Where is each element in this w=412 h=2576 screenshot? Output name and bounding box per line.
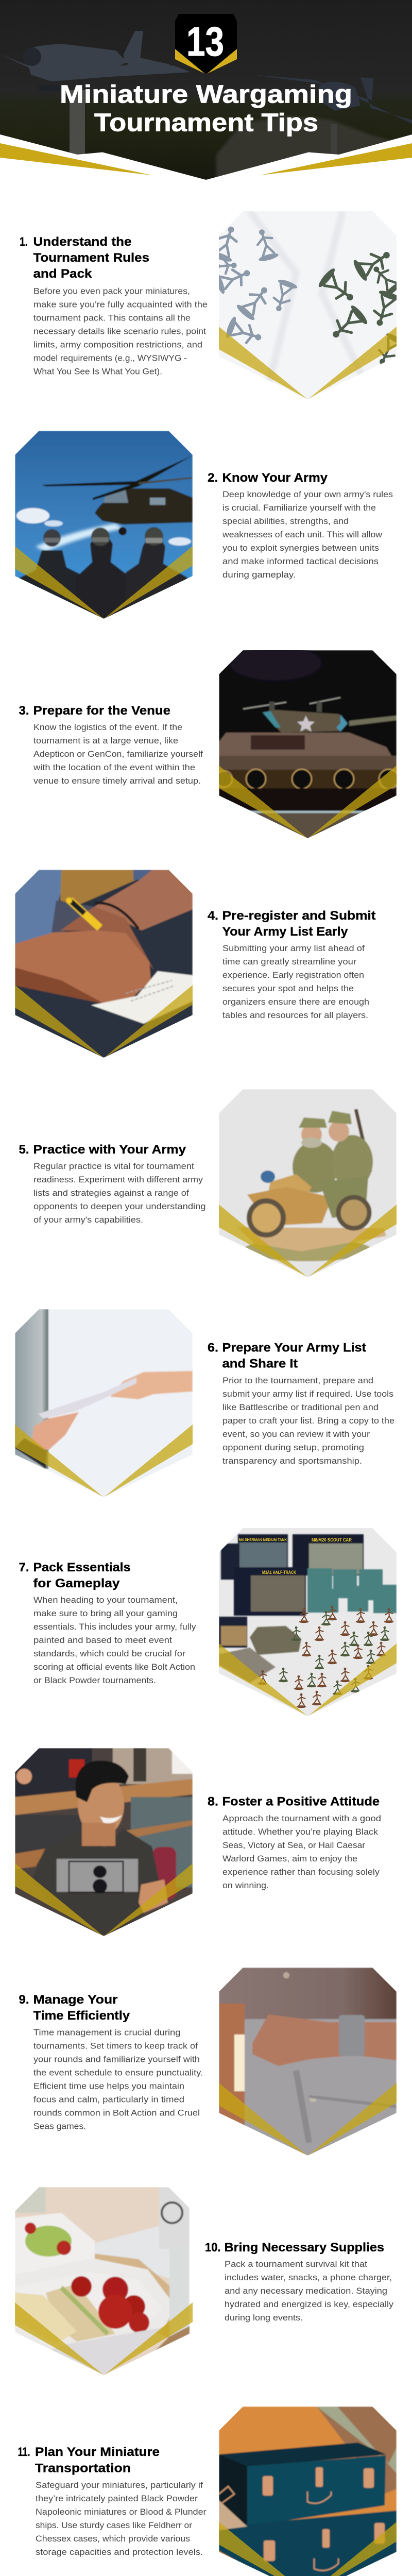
tip 5: [19, 1089, 397, 1277]
body text: hydrated and energized is key, especially: [225, 2299, 394, 2309]
body text: rounds common in Bolt Action and Cruel: [33, 2108, 200, 2117]
heading: [19, 1561, 131, 1590]
heading: Manage Your: [33, 1993, 118, 2007]
body text: during long events.: [225, 2313, 303, 2323]
tip 2: [15, 431, 393, 619]
heading: [20, 235, 149, 281]
heading: Transportation: [35, 2462, 131, 2475]
box labels: M3A1 HALF-TRACK: [262, 1570, 296, 1575]
photo: packed lunch boxes: [15, 2187, 193, 2375]
heading: 10.: [205, 2241, 220, 2255]
body text: opponent during setup, promoting: [222, 1443, 364, 1452]
body text: venue to ensure timely arrival and setup.: [33, 776, 201, 786]
body text: with the location of the event within the: [33, 762, 195, 772]
body text: secures your spot and helps the: [222, 984, 354, 993]
body text: [225, 2259, 394, 2323]
body text: essentials. This includes your army, fully: [33, 1622, 196, 1632]
heading: 5.: [19, 1143, 29, 1157]
body text: ships. Use sturdy cases like Feldherr or: [36, 2520, 192, 2530]
body text: Deep knowledge of your own army's rules: [222, 489, 393, 499]
photo: hand writing with pen: [15, 870, 193, 1058]
tip 6: [15, 1309, 394, 1497]
heading: 1.: [20, 235, 28, 249]
body text: [33, 2028, 203, 2131]
body text: [222, 1814, 381, 1890]
body text: Adepticon or GenCon, familiarize yourself: [33, 749, 203, 759]
heading: 9.: [19, 1993, 29, 2007]
body text: [33, 1161, 205, 1225]
body text: Warlord Games, aim to enjoy the: [222, 1854, 357, 1863]
photo: miniature motorcycle soldiers: [219, 1089, 397, 1277]
body text: Regular practice is vital for tournament: [33, 1161, 194, 1171]
body text: tournaments. Set timers to keep track of: [33, 2041, 198, 2050]
body text: scoring at official events like Bolt Action: [33, 1662, 195, 1672]
body text: make sure to bring all your gaming: [33, 1608, 178, 1618]
heading: Pack Essentials: [33, 1561, 131, 1574]
gold chevron left: [0, 143, 152, 175]
title: [60, 80, 352, 137]
body text: Time management is crucial during: [33, 2028, 180, 2037]
body text: paper to craft your list. Bring a copy to the: [222, 1416, 394, 1426]
body text: storage capacities and protection levels.: [36, 2547, 203, 2557]
heading: 6.: [208, 1341, 218, 1355]
body text: is crucial. Familiarize yourself with the: [222, 503, 376, 513]
white chevron: [0, 134, 412, 216]
body text: make sure you're fully acquainted with the: [33, 300, 208, 309]
heading: 3.: [19, 704, 29, 718]
heading: Your Army List Early: [222, 925, 348, 939]
tip 3: [19, 645, 399, 839]
photo: boxed miniature kits and painted soldiers: [219, 1528, 397, 1716]
header banner: [0, 0, 412, 216]
gold overlay: [219, 766, 397, 838]
heading: 11.: [18, 2445, 30, 2459]
body text: Seas, Victory at Sea, or Hail Caesar: [222, 1840, 365, 1850]
body text: event, so you can review it with your: [222, 1429, 370, 1439]
body text: standards, which could be crucial for: [33, 1649, 186, 1658]
heading: [208, 909, 376, 939]
box labels: [239, 1537, 352, 1575]
body text: like Battlescribe or traditional pen and: [222, 1402, 379, 1412]
body text: Know the logistics of the event. If the: [33, 722, 182, 732]
body text: time can greatly streamline your: [222, 957, 357, 967]
gold overlay: [15, 2302, 193, 2375]
heading: Understand the: [33, 235, 132, 249]
body text: during gameplay.: [222, 570, 296, 580]
body text: experience. Early registration often: [222, 970, 364, 980]
heading: and Share It: [222, 1357, 298, 1370]
gold overlay: [15, 985, 193, 1058]
body text: Pack a tournament survival kit that: [225, 2259, 367, 2269]
heading: 7.: [19, 1561, 29, 1574]
body text: [222, 943, 369, 1020]
heading: Tournament Rules: [33, 251, 149, 265]
body text: they’re intricately painted Black Powder: [36, 2494, 198, 2503]
body text: Approach the tournament with a good: [222, 1814, 381, 1823]
body text: tournament pack. This contains all the: [33, 313, 191, 323]
body text: you to exploit synergies between units: [222, 543, 379, 553]
gold overlay: [219, 327, 397, 399]
body text: Chessex cases, which provide various: [36, 2534, 190, 2544]
body text: includes water, snacks, a phone charger,: [225, 2273, 392, 2282]
body text: Napoleonic miniatures or Blood & Plunder: [36, 2507, 207, 2517]
gold overlay: [219, 2083, 397, 2156]
body text: Before you even pack your miniatures,: [33, 286, 190, 296]
body text: Submitting your army list ahead of: [222, 943, 365, 953]
body text: the event schedule to ensure punctuality.: [33, 2068, 203, 2077]
body text: [222, 489, 393, 580]
heading: Practice with Your Army: [33, 1143, 186, 1157]
heading: Pre-register and Submit: [222, 909, 376, 923]
heading: Bring Necessary Supplies: [225, 2241, 384, 2255]
photo: model tank on dark background: [216, 645, 399, 839]
body text: What You See Is What You Get).: [33, 367, 162, 376]
body text: transparency and sportsmanship.: [222, 1456, 362, 1466]
body text: special abilities, strengths, and: [222, 516, 349, 526]
body text: Seas games.: [33, 2122, 86, 2131]
body text: on winning.: [222, 1880, 269, 1890]
body text: When heading to your tournament,: [33, 1595, 178, 1605]
body text: Safeguard your miniatures, particularly if: [36, 2480, 203, 2490]
plane left: [0, 31, 191, 91]
photo: smiling man in a cafe: [15, 1748, 193, 1936]
body text: [33, 1595, 196, 1685]
gold overlay: [219, 1205, 397, 1277]
heading: for Gameplay: [33, 1577, 120, 1590]
gold overlay: [219, 2522, 397, 2576]
title: Miniature Wargaming: [60, 80, 352, 108]
photo: helicopter and soldiers: [15, 431, 193, 619]
heading: Foster a Positive Attitude: [222, 1795, 380, 1808]
photo: man checking wristwatch: [219, 1968, 397, 2158]
header background photo: model planes: [0, 0, 412, 185]
tip 10: [15, 2187, 394, 2375]
tip 7: [19, 1528, 397, 1716]
body text: focus and calm, particularly in timed: [33, 2095, 184, 2104]
heading: Time Efficiently: [33, 2009, 130, 2023]
tip 9: [19, 1968, 397, 2158]
body text: [33, 286, 208, 376]
body text: of your army's capabilities.: [33, 1215, 143, 1225]
title: Tournament Tips: [94, 109, 318, 137]
body text: organizers ensure there are enough: [222, 997, 369, 1007]
gold overlay: [15, 1425, 193, 1497]
heading: 8.: [208, 1795, 218, 1808]
photo: teal storage cases: [219, 2406, 397, 2576]
heading: Prepare for the Venue: [33, 704, 170, 718]
photo: toy soldiers: [219, 211, 397, 399]
body text: Prior to the tournament, prepare and: [222, 1376, 373, 1385]
box labels: M8/M20 SCOUT CAR: [312, 1537, 352, 1543]
tip 4: [15, 870, 376, 1058]
heading: 4.: [208, 909, 218, 923]
badge with number 13: [175, 14, 237, 74]
body text: limits, army composition restrictions, and: [33, 340, 202, 349]
heading: and Pack: [33, 267, 92, 281]
photo: hands passing a paper: [15, 1309, 193, 1497]
body text: and make informed tactical decisions: [222, 556, 379, 566]
tip 1: [20, 211, 405, 399]
heading: [208, 1341, 366, 1370]
gold overlay: [15, 1863, 193, 1936]
body text: tables and resources for all players.: [222, 1010, 368, 1020]
gold overlay: [219, 1643, 397, 1716]
body text: tournament is at a large venue, like: [33, 736, 178, 745]
body text: [36, 2480, 207, 2557]
heading: Prepare Your Army List: [222, 1341, 366, 1355]
heading: [18, 2445, 160, 2475]
body text: model requirements (e.g., WYSIWYG -: [33, 353, 187, 363]
plane right: [252, 75, 412, 124]
body text: Efficient time use helps you maintain: [33, 2081, 184, 2091]
gold chevron right: [260, 143, 412, 175]
tip 11: [18, 2406, 397, 2576]
body text: and any necessary medication. Staying: [225, 2286, 387, 2296]
gold overlay: [15, 546, 193, 619]
badge with number 13: 13: [186, 19, 224, 64]
heading: Plan Your Miniature: [35, 2445, 160, 2459]
heading: [19, 1993, 130, 2023]
body text: attitude. Whether you’re playing Black: [222, 1827, 379, 1837]
body text: or Black Powder tournaments.: [33, 1675, 156, 1685]
heading: 2.: [208, 471, 218, 485]
heading: Know Your Army: [222, 471, 328, 485]
body text: opponents to deepen your understanding: [33, 1201, 205, 1211]
body text: [33, 722, 203, 786]
body text: [222, 1376, 394, 1466]
body text: submit your army list if required. Use tools: [222, 1389, 393, 1399]
body text: necessary details like scenario rules, point: [33, 327, 206, 336]
body text: readiness. Experiment with different army: [33, 1175, 203, 1184]
box labels: M4 SHERMAN MEDIUM TANK: [239, 1537, 287, 1542]
body text: lists and strategies against a range of: [33, 1188, 189, 1198]
body text: weaknesses of each unit. This will allow: [222, 530, 383, 539]
miniature soldiers: [258, 1606, 393, 1708]
tip 8: [15, 1748, 381, 1936]
body text: your rounds and familiarize yourself with: [33, 2055, 200, 2064]
body text: experience rather than focusing solely: [222, 1867, 380, 1877]
body text: painted and based to meet event: [33, 1635, 172, 1645]
